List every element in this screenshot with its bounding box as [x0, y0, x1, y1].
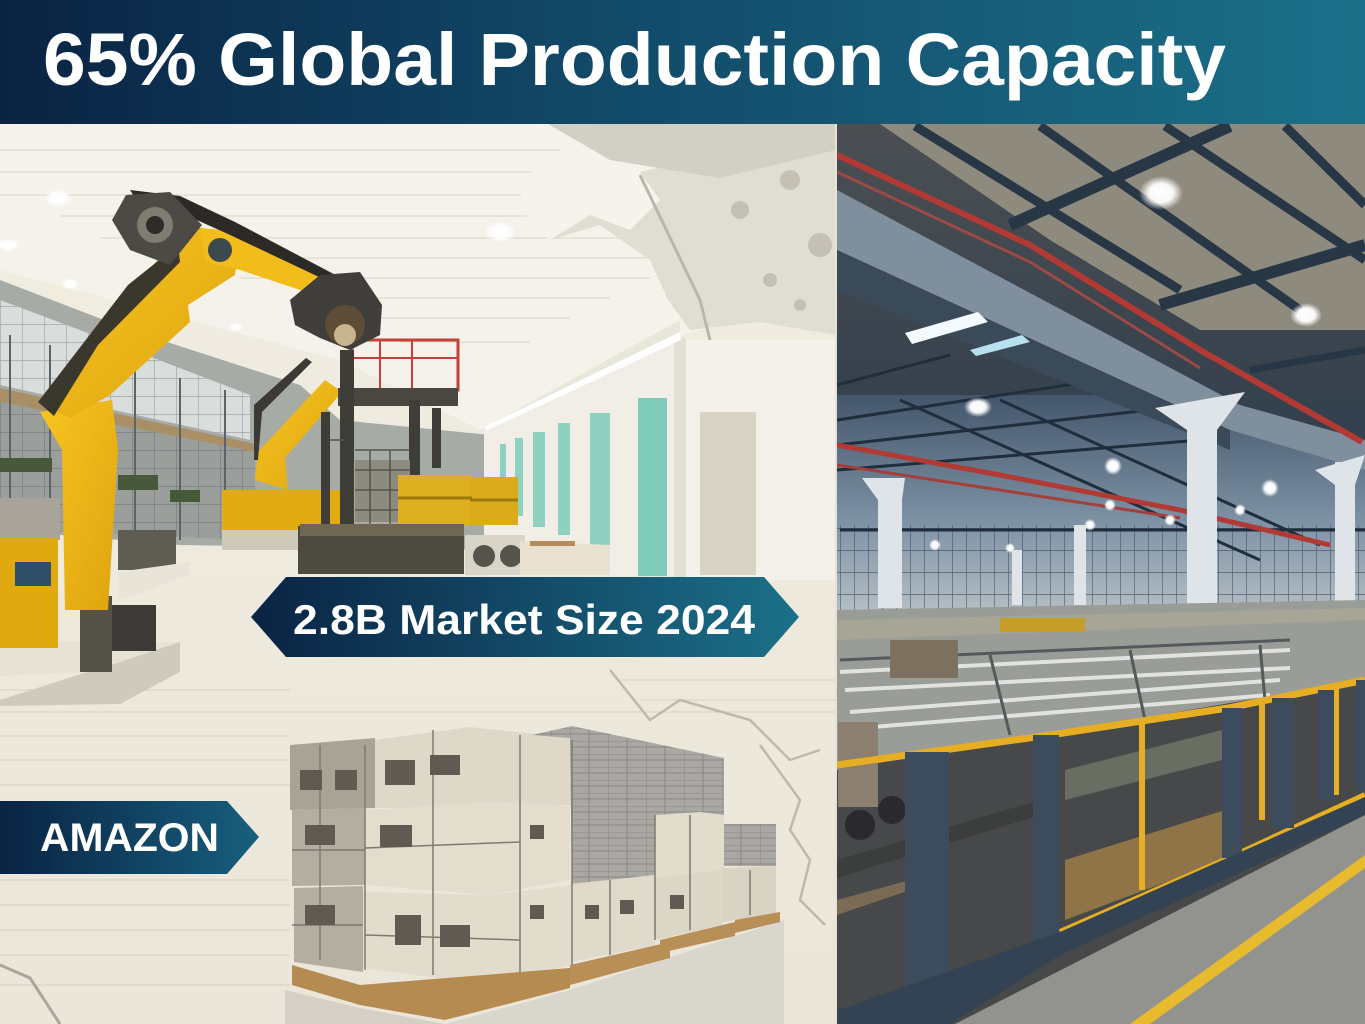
icon: stacked boxes on pallets	[285, 726, 784, 1024]
yellow and steel railing	[837, 680, 1365, 1024]
far hall lower ceiling	[837, 395, 1365, 610]
floor lines	[0, 680, 836, 985]
wall texture panel	[700, 412, 756, 575]
callout: Amazon: AMAZON	[40, 816, 219, 860]
production lines	[837, 600, 1365, 770]
callout: Amazon	[0, 801, 259, 874]
lights	[905, 176, 1322, 553]
header band	[0, 0, 1365, 124]
far hall background	[0, 280, 490, 550]
map overlay	[0, 124, 836, 1024]
callout: market size: 2.8B Market Size 2024	[293, 596, 756, 643]
panel: right factory interior	[837, 124, 1365, 1024]
main steel truss with red pipe	[837, 190, 1365, 470]
icon: small yellow robot arm	[222, 358, 342, 550]
teal windows	[500, 398, 667, 576]
callout: market size	[251, 577, 799, 657]
floor with yellow line	[955, 815, 1365, 1024]
icon: large yellow robot arm	[0, 190, 382, 706]
title: 65% Global Production Capacity	[43, 18, 1226, 101]
ceiling panels	[880, 124, 1365, 330]
divider between scenes	[835, 124, 837, 1024]
icon: scaffold with yellow crates	[298, 340, 610, 575]
ceiling	[0, 124, 836, 430]
right wall with windows	[484, 340, 680, 576]
worker area and lower shelves	[837, 680, 1365, 1024]
columns	[862, 392, 1365, 608]
panel: left warehouse scene	[0, 124, 836, 1024]
